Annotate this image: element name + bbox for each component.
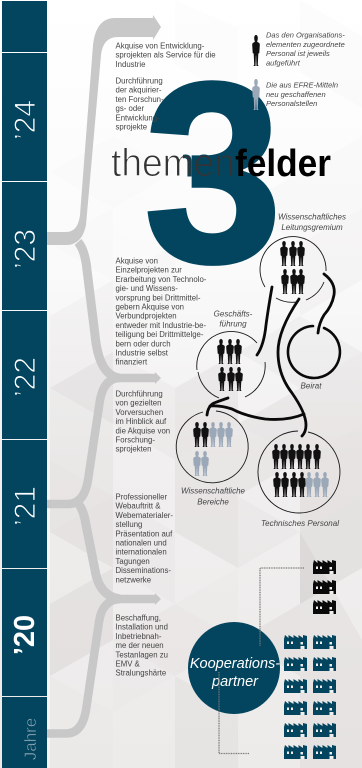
text block: Webauftritt und Präsentation: Präsentation auf: [116, 529, 173, 538]
node: Geschäftsführung: [197, 310, 265, 398]
text block: Durchführung Forschungsprojekte: sprojekte: [116, 122, 147, 132]
circle: Kooperationspartner: partner: [211, 674, 259, 690]
text block: Vorversuche: von gezielten: [116, 399, 161, 408]
big numeral 3: 3: [144, 31, 282, 316]
text block: Durchführung Forschungsprojekte: Entwicklung-: [116, 113, 160, 122]
icons: navy factories: [284, 635, 336, 759]
timeline arrows: [47, 15, 161, 734]
staff icons: [280, 241, 305, 294]
text block: Beschaffung Testanlagen: Stralungshärte: [116, 669, 166, 678]
year 2021: ’21: [9, 486, 42, 526]
label: Wissenschaftliche: [181, 486, 246, 496]
label: Geschäfts-: [214, 310, 253, 318]
text block: Akquise Einzelprojekte: Erarbeitung von Technolo-: [116, 275, 207, 284]
text block: Durchführung Forschungsprojekte: ten Forschun-: [116, 95, 164, 104]
arrow: 2023 to 2024: [47, 15, 161, 245]
label: Technisches Personal: [261, 519, 339, 528]
text block: Webauftritt und Präsentation: netzwerke: [116, 575, 151, 584]
text block: Webauftritt und Präsentation: Disseminations-: [116, 566, 171, 575]
text block: Durchführung Forschungsprojekte: der akquirier-: [116, 86, 162, 95]
circle: Kooperationspartner: [188, 622, 280, 714]
text block: Akquise Einzelprojekte: entweder mit Industrie-be-: [116, 321, 206, 330]
legend text: EFRE staff: neu geschaffenen: [266, 90, 326, 99]
arrow: 2021 to 2022: [47, 242, 161, 504]
text block: Durchführung Forschungsprojekte: Durchführung: [116, 76, 163, 86]
arrow: 2019 to 2021: [47, 500, 161, 734]
legend text: EFRE staff: Personalstellen: [266, 99, 317, 108]
text block: Beschaffung Testanlagen: EMV &: [116, 660, 141, 668]
text block: Beschaffung Testanlagen: Installation und: [116, 623, 168, 632]
icons: black factories: [313, 560, 336, 614]
circle: [258, 431, 340, 513]
title: themenfelder: felder: [235, 143, 331, 185]
text block: Akquise Einzelprojekte: teiligung bei Drittmittelge-: [116, 330, 204, 339]
text block: Webauftritt und Präsentation: nationalen und: [116, 538, 167, 548]
text block: Webauftritt und Präsentation: Webematerialer-: [116, 511, 173, 520]
text block: Akquise Entwicklungsprojekte: Industrie: [116, 60, 145, 69]
title: themenfelder: themen: [111, 142, 235, 185]
title: themenfelder: [111, 142, 331, 185]
timeline bar: years: [2, 1, 47, 768]
text block: Akquise Einzelprojekte: Industrie selbst: [116, 348, 169, 358]
text block: Akquise Entwicklungsprojekte: Akquise von Entwicklung-: [116, 42, 205, 50]
text block: Webauftritt und Präsentation: Professioneller: [116, 492, 167, 502]
legend text: assigned staff: aufgeführt: [266, 58, 301, 68]
text block: Beschaffung Testanlagen: Testanlagen zu: [116, 650, 168, 659]
staff icons: [272, 444, 321, 497]
circle: [288, 326, 340, 378]
icon: grey person: [252, 79, 260, 110]
organisation network lines: [207, 274, 334, 436]
year 2020: ’20: [9, 615, 41, 655]
legend text: assigned staff: Personal ist jeweils: [266, 49, 330, 58]
text block: Akquise Einzelprojekte: gebern Akquise von: [116, 302, 184, 312]
text block: Vorversuche: Durchführung: [116, 390, 163, 398]
text block: Vorversuche: Vorversuchen: [116, 408, 163, 417]
text block: Beschaffung Testanlagen: me der neuen: [116, 641, 164, 650]
label: Leitungsgremium: [281, 223, 343, 232]
staff icons: [217, 339, 243, 391]
axis label: Jahre: Jahre: [21, 718, 40, 760]
text block: Akquise Einzelprojekte: gie- und Wissens-: [116, 284, 178, 293]
label: Bereiche: [197, 498, 229, 506]
dotted connectors: [219, 568, 304, 754]
circle: [197, 331, 265, 398]
text block: Akquise Entwicklungsprojekte: sprojekten als Service für die: [116, 51, 216, 60]
legend text: EFRE staff: Die aus EFRE-Mitteln: [266, 80, 338, 90]
staff icons: [193, 422, 201, 447]
label: führung: [219, 320, 247, 328]
text block: Durchführung Forschungsprojekte: gs- oder: [116, 104, 145, 113]
year 2023: ’23: [9, 229, 42, 269]
text block: Akquise Einzelprojekte: vorsprung bei Drittmittel-: [116, 293, 201, 302]
text block: Vorversuche: Forschung-: [116, 436, 155, 444]
label: Beirat: [301, 382, 322, 390]
text block: Akquise Einzelprojekte: bern oder durch: [116, 339, 171, 348]
label: Wissenschaftliches: [278, 212, 346, 222]
text block: Vorversuche: im Hinblick auf: [116, 417, 167, 426]
circle: [260, 237, 326, 302]
text block: Akquise Einzelprojekte: Akquise von: [116, 256, 158, 266]
text block: Webauftritt und Präsentation: stellung: [116, 520, 142, 529]
node: Wissenschaftliches Leitungsgremium: [260, 212, 346, 302]
legend text: assigned staff: Das den Organisations-: [266, 30, 345, 40]
text block: Akquise Einzelprojekte: finanziert: [116, 358, 148, 367]
text block: Akquise Einzelprojekte: Einzelprojekten zur: [116, 266, 182, 275]
text block: Webauftritt und Präsentation: internationalen: [116, 548, 167, 557]
icon: black person: [252, 35, 260, 66]
text block: Webauftritt und Präsentation: Tagungen: [116, 557, 150, 566]
node: Wissenschaftliche Bereiche: [176, 411, 248, 506]
node: Beirat: [288, 326, 340, 390]
text block: Webauftritt und Präsentation: Webauftritt &: [116, 502, 161, 511]
legend: [252, 30, 345, 110]
circle: Kooperationspartner: Kooperations-: [190, 656, 280, 672]
circle: [176, 411, 248, 483]
text block: Akquise Einzelprojekte: Verbundprojekten: [116, 312, 177, 321]
text block: Beschaffung Testanlagen: Beschaffung,: [116, 614, 161, 622]
year 2024: ’24: [9, 100, 42, 140]
year 2022: ’22: [9, 357, 42, 397]
legend text: assigned staff: elementen zugeordnete: [266, 40, 345, 49]
text block: Vorversuche: die Akquise von: [116, 426, 170, 435]
text block: Beschaffung Testanlagen: Inbetriebnah-: [116, 632, 162, 641]
node: Technisches Personal: [258, 431, 340, 528]
text block: Vorversuche: sprojekten: [116, 445, 151, 454]
